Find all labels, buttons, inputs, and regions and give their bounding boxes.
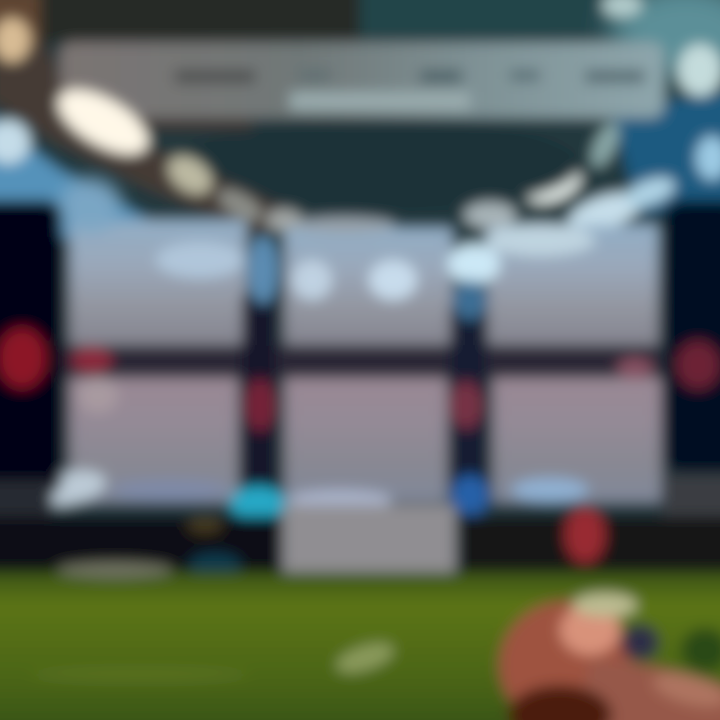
lower panels xyxy=(31,377,661,511)
pillar: right centre xyxy=(449,280,489,515)
pitch xyxy=(0,562,720,720)
dark dome xyxy=(170,117,580,213)
sky glow: left and right blue xyxy=(0,90,720,240)
lower stands xyxy=(0,505,720,577)
pillar: left centre xyxy=(230,236,286,520)
tower: right xyxy=(662,200,720,525)
upper panels xyxy=(60,179,658,345)
football xyxy=(499,593,720,720)
tower: left xyxy=(0,200,62,550)
horizontal dark band xyxy=(60,346,660,379)
roof beam with lights xyxy=(0,18,720,235)
title block: blurred text xyxy=(60,42,664,130)
